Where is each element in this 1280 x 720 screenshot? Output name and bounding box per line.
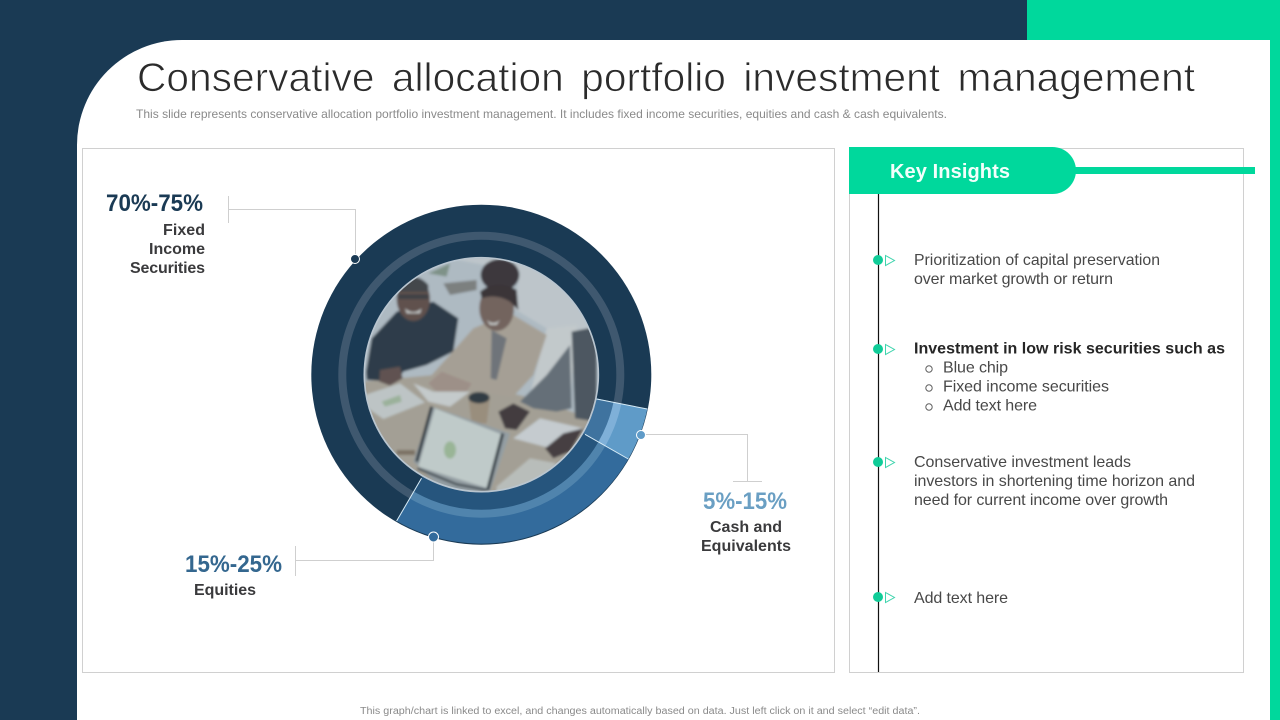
subtitle: This slide represents conservative allocation portfolio investment management. It includes fixed income securities, equities and cash & cash equivalents. — [136, 107, 947, 121]
insight 1: over market growth or return — [914, 271, 1113, 288]
donut chart — [311, 205, 651, 545]
insight 4: Add text here — [914, 590, 1008, 607]
callout: equities: 15%-25% — [185, 551, 282, 578]
insight 2: Fixed income securities — [943, 378, 1109, 396]
insight 2: Investment in low risk securities such as — [914, 340, 1225, 358]
insight 3: Conservative investment leads — [914, 454, 1131, 471]
photo: team reviewing laptop — [363, 257, 600, 493]
timeline — [878, 194, 880, 672]
insight 1 — [873, 252, 1160, 288]
insight 3: investors in shortening time horizon and — [914, 473, 1195, 490]
callout: cash and equivalents: Equivalents — [701, 538, 791, 555]
callout: fixed income securities: Securities — [130, 260, 205, 277]
panel: key insights — [849, 147, 1255, 672]
title: Conservative allocation portfolio investment management — [137, 56, 1195, 100]
callout: cash and equivalents — [636, 430, 791, 555]
callout: fixed income securities: Fixed — [163, 222, 205, 239]
callout: cash and equivalents: Cash and — [710, 519, 782, 536]
insight 2 — [873, 340, 1225, 414]
callout: fixed income securities: Income — [149, 241, 205, 258]
insight 2: Blue chip — [943, 360, 1008, 376]
insight 2: Add text here — [943, 398, 1037, 414]
key insights header: Key Insights — [890, 161, 1010, 183]
callout: fixed income securities: 70%-75% — [106, 190, 203, 217]
footnote: This graph/chart is linked to excel, and changes automatically based on data. Just left click on it and select “edit data”. — [360, 706, 920, 717]
insight 3 — [873, 454, 1195, 509]
insight 1: Prioritization of capital preservation — [914, 252, 1160, 269]
key insights header — [849, 147, 1255, 194]
callout: equities — [185, 532, 438, 599]
callout: equities: Equities — [194, 582, 256, 599]
insight 4 — [873, 590, 1008, 607]
insight 3: need for current income over growth — [914, 492, 1168, 509]
callout: fixed income securities — [106, 190, 360, 277]
panel: allocation chart — [82, 148, 834, 672]
callout: cash and equivalents: 5%-15% — [703, 488, 787, 515]
